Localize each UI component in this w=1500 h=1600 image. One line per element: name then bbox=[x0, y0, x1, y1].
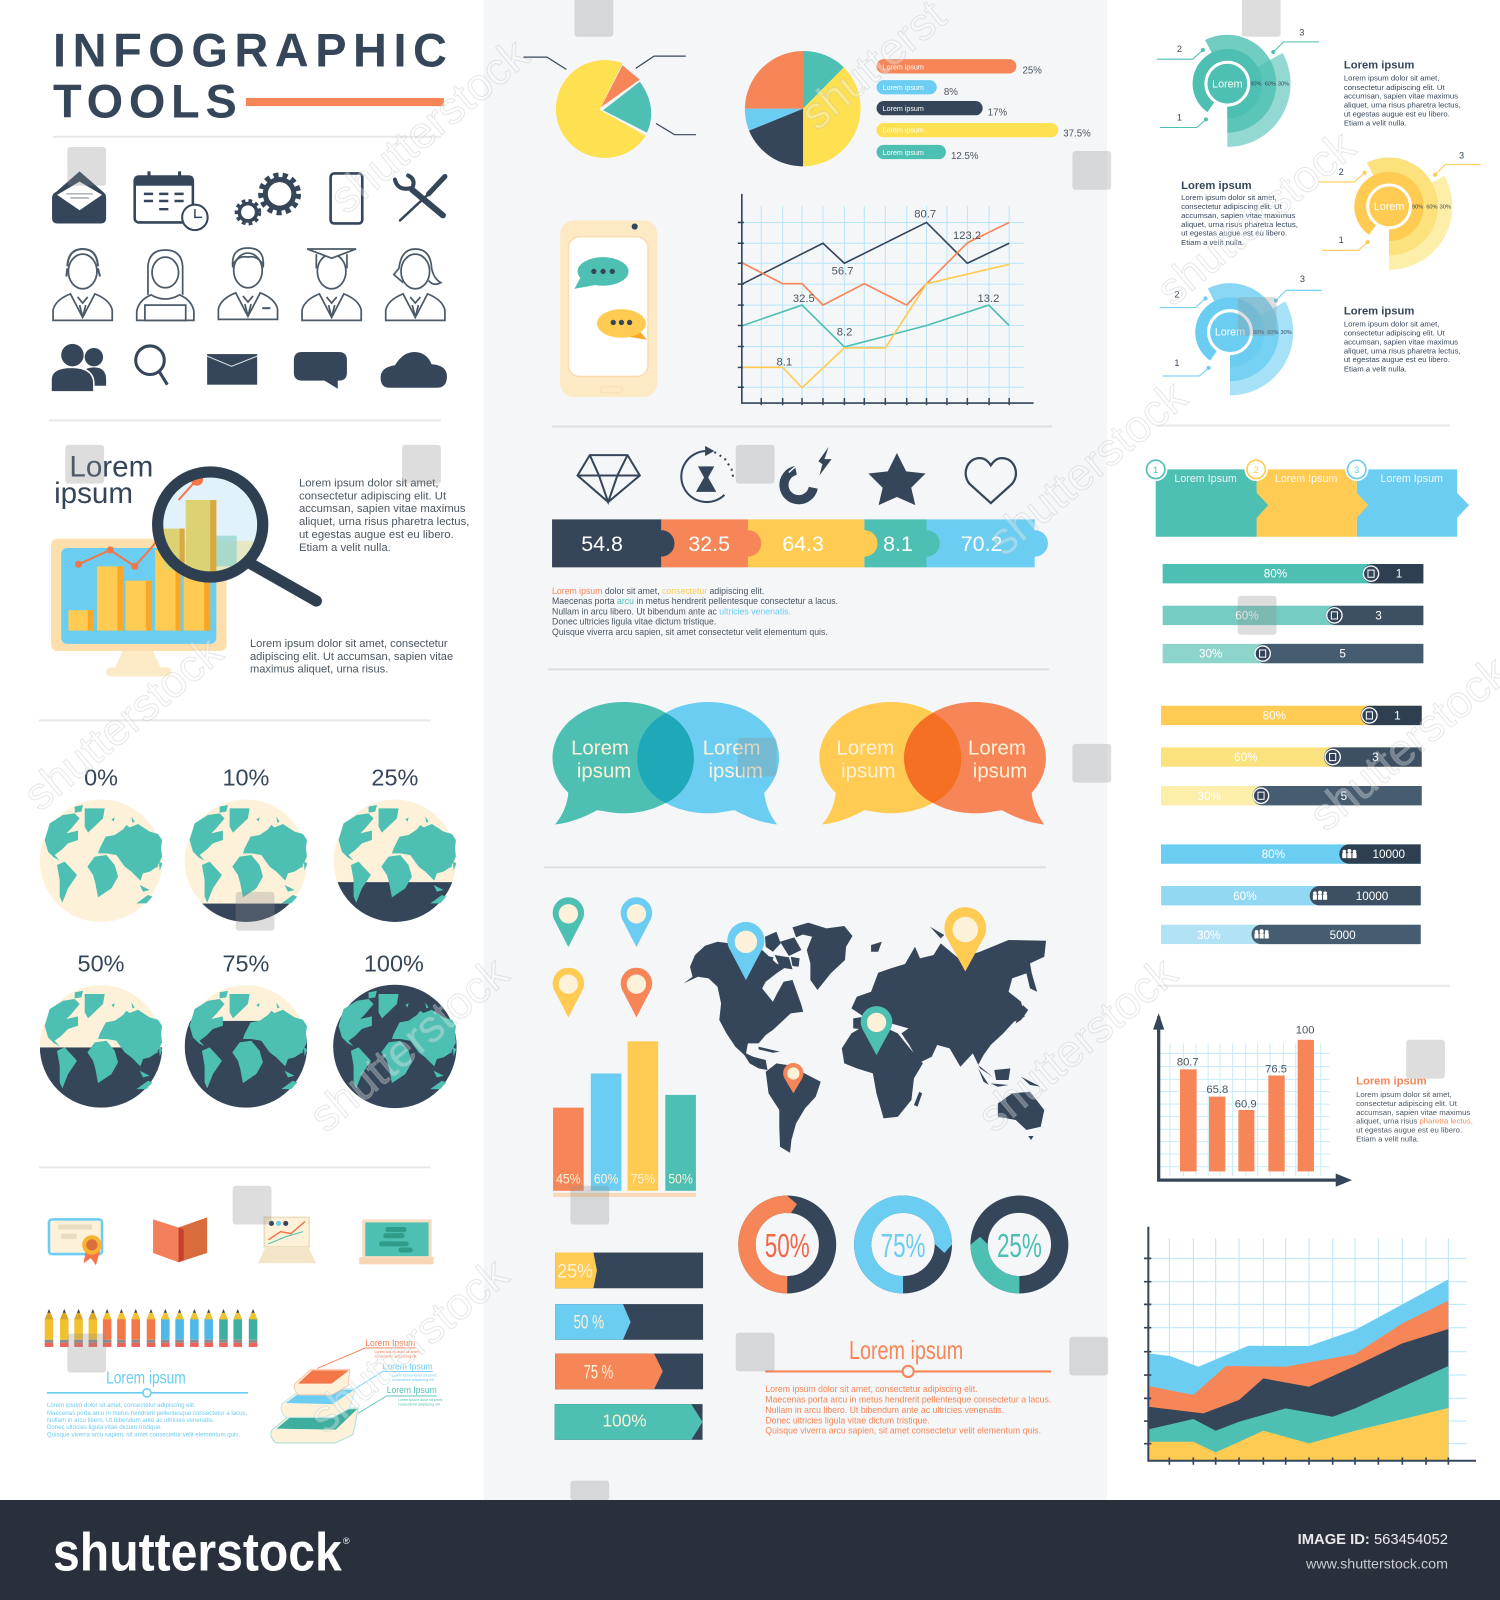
text block: teal radial note bbox=[1344, 59, 1461, 128]
chart: exploded pie bbox=[523, 56, 696, 158]
icon: stacked books with callouts: Lorem ipsum dolor sit amet, bbox=[374, 1350, 420, 1354]
speech bubbles: yellow and orange: ipsum bbox=[973, 761, 1027, 783]
radial chart: blue: 60% bbox=[1267, 330, 1278, 336]
chart: puzzle segment bar: 64.3 bbox=[782, 532, 824, 556]
chart: pie with labelled bars: Lorem ipsum bbox=[883, 127, 924, 135]
title: TOOLS bbox=[53, 75, 237, 127]
text block: monitor description: Lorem ipsum dolor sit amet, bbox=[299, 478, 439, 490]
chart: multi-line chart: 8.2 bbox=[837, 327, 852, 339]
text block: coloured paragraph: Lorem ipsum dolor sit amet, consectetur adipiscing elit. bbox=[552, 586, 764, 596]
text block: monitor description: consectetur adipiscing elit. Ut bbox=[299, 490, 447, 502]
text block: blue paragraph: Donec ultricies ligula vitae dictum tristique. bbox=[47, 1424, 162, 1431]
globes: progress set: 0% bbox=[84, 765, 118, 791]
donut: 75% bbox=[863, 1204, 953, 1285]
icon: hourglass with timer bbox=[681, 446, 734, 502]
speech bubbles: teal and blue: ipsum bbox=[709, 761, 763, 783]
chart: multi-line chart: 80.7 bbox=[914, 208, 936, 220]
text block: blue paragraph: Quisque viverra arcu sapien, sit amet consectetur velit elementum quis. bbox=[47, 1432, 240, 1439]
speech bubbles: teal and blue bbox=[553, 702, 779, 824]
watermark: diagonal text: shutterstock bbox=[320, 28, 538, 223]
icon: stacked books with callouts: consectetur adipiscing elit. bbox=[398, 1403, 441, 1407]
text block: teal radial note: aliquet, urna risus pharetra lectus, bbox=[1344, 101, 1461, 110]
icon: businessman bbox=[218, 248, 278, 319]
icon: phone with chat bubbles bbox=[560, 220, 657, 397]
pencils row bbox=[45, 1309, 257, 1347]
chart: pie with labelled bars: Lorem ipsum bbox=[883, 84, 924, 92]
footer image id: www.shutterstock.com bbox=[1305, 1556, 1448, 1572]
bar set: blue people bars: 60% bbox=[1233, 890, 1257, 903]
text block: orange paragraph: Lorem ipsum dolor sit amet, consectetur adipiscing elit. bbox=[765, 1384, 978, 1394]
text block: monitor note: adipiscing elit. Ut accumsan, sapien vitae bbox=[250, 651, 453, 663]
radial chart: yellow bbox=[1319, 150, 1481, 270]
text block: blue radial note: consectetur adipiscing elit. Ut bbox=[1344, 329, 1446, 338]
icon: open envelope bbox=[52, 171, 106, 223]
globe 75% bbox=[185, 985, 307, 1109]
chart: puzzle segment bar: 70.2 bbox=[961, 532, 1002, 556]
progress bar 75%: 75 % bbox=[584, 1362, 613, 1384]
globe 0% bbox=[40, 799, 162, 922]
text block: yellow radial note bbox=[1181, 180, 1298, 247]
footer logo: ® bbox=[343, 1536, 350, 1546]
icon: magnifying glass over chart bbox=[158, 472, 316, 601]
icon: stacked books with callouts: consectetur adipiscing elit. bbox=[392, 1378, 435, 1382]
globe 25% bbox=[334, 799, 456, 923]
donut: 75%: 75% bbox=[881, 1228, 926, 1265]
radial chart: blue: Lorem bbox=[1215, 327, 1245, 339]
icon: stacked books with callouts: Lorem ipsum dolor sit amet, bbox=[398, 1398, 443, 1402]
icon: stacked books with callouts: Lorem Ipsum bbox=[383, 1361, 433, 1371]
icon: businesswoman bbox=[386, 249, 445, 320]
text block: teal radial note: Etiam a velit nulla. bbox=[1344, 119, 1407, 128]
chart: puzzle segment bar: 54.8 bbox=[581, 532, 623, 556]
text block: orange paragraph: Donec ultricies ligula vitae dictum tristique. bbox=[765, 1415, 930, 1425]
text block: orange bar chart note: Lorem ipsum bbox=[1356, 1076, 1427, 1088]
bar set: teal duration bars bbox=[1163, 564, 1423, 663]
text block: yellow radial note: aliquet, urna risus pharetra lectus, bbox=[1181, 220, 1298, 229]
radial chart: teal: 90% bbox=[1250, 82, 1262, 88]
pin: Mediterranean bbox=[861, 1006, 892, 1055]
chart: multi-line chart: 8.1 bbox=[777, 356, 792, 368]
chart: pie with labelled bars: Lorem ipsum bbox=[883, 63, 924, 71]
chart: vertical bars bbox=[553, 1041, 696, 1197]
text block: monitor description: Etiam a velit nulla. bbox=[299, 542, 391, 554]
chart: orange bar chart: 65.8 bbox=[1206, 1084, 1228, 1096]
chart: orange bar chart: 100 bbox=[1296, 1024, 1314, 1036]
watermark: diagonal text: shutterstock bbox=[14, 625, 232, 820]
text block: yellow radial note: Lorem ipsum bbox=[1181, 180, 1252, 192]
text block: blue paragraph: Maecenas porta arcu in metus hendrerit pellentesque consectetur a lacus. bbox=[47, 1410, 248, 1417]
globe 50% bbox=[40, 985, 162, 1109]
icon: user group bbox=[51, 344, 106, 392]
radial chart: blue: 2 bbox=[1174, 289, 1179, 299]
icon: cloud bbox=[381, 352, 447, 388]
donut: 25%: 25% bbox=[997, 1228, 1042, 1265]
globes: progress set: 25% bbox=[371, 765, 419, 791]
text block: monitor note: Lorem ipsum dolor sit amet, consectetur bbox=[250, 638, 448, 650]
icon: map pin set bbox=[553, 897, 652, 1017]
watermark: diagonal text: shutterstock bbox=[1146, 120, 1365, 315]
radial chart: yellow: 60% bbox=[1426, 204, 1438, 210]
icon: laptop with chart bbox=[258, 1217, 316, 1263]
chart: pie with labelled bars: 17% bbox=[988, 107, 1008, 118]
globes: progress set: 10% bbox=[222, 765, 270, 791]
radial chart: blue: 3 bbox=[1300, 274, 1305, 284]
icon: calendar and clock bbox=[135, 171, 208, 230]
chart: multi-line chart: 123.2 bbox=[953, 230, 981, 242]
text block: orange bar chart note: aliquet, urna risus pharetra lectus, bbox=[1356, 1116, 1473, 1125]
radial chart: teal: 2 bbox=[1177, 44, 1182, 54]
text block: blue radial note: Lorem ipsum bbox=[1344, 305, 1414, 317]
heading: Lorem ipsum: ipsum bbox=[54, 477, 133, 510]
radial chart: yellow: Lorem bbox=[1374, 201, 1404, 213]
text block: orange bar chart note bbox=[1356, 1076, 1473, 1143]
text block: coloured paragraph: Nullam in arcu libero. Ut bibendum ante ac ultricies venenatis. bbox=[552, 606, 791, 616]
chart: orange bar chart: 60.9 bbox=[1235, 1099, 1257, 1111]
heading: orange Lorem ipsum with rule: Lorem ipsum bbox=[849, 1337, 963, 1365]
icon: magnet bbox=[784, 447, 832, 500]
radial chart: teal: 30% bbox=[1278, 82, 1289, 88]
text block: blue radial note: aliquet, urna risus pharetra lectus, bbox=[1344, 347, 1461, 356]
radial chart: blue: 30% bbox=[1281, 330, 1292, 336]
chart: pie with labelled bars: Lorem ipsum bbox=[883, 105, 924, 113]
speech bubbles: yellow and orange bbox=[819, 702, 1046, 824]
icon: magnifying glass bbox=[136, 346, 167, 385]
chart: orange bar chart bbox=[1153, 1013, 1352, 1187]
footer logo: shutterstock bbox=[53, 1522, 343, 1582]
icon: stacked books with callouts: Lorem ipsum dolor sit amet, bbox=[392, 1374, 437, 1378]
bar set: yellow duration bars: 1 bbox=[1394, 709, 1401, 722]
chart: orange bar chart: 76.5 bbox=[1265, 1063, 1287, 1075]
progress bar 25%: 25% bbox=[557, 1261, 593, 1283]
text block: blue radial note: Etiam a velit nulla. bbox=[1344, 364, 1407, 373]
speech bubbles: yellow and orange: ipsum bbox=[841, 761, 896, 783]
icon: gears bbox=[237, 175, 298, 223]
progress bar 100%: 100% bbox=[602, 1411, 647, 1431]
bar set: teal duration bars: 1 bbox=[1396, 568, 1402, 581]
title: INFOGRAPHIC bbox=[53, 24, 447, 76]
progress bar 100% bbox=[555, 1404, 703, 1440]
icon: stacked books with callouts: consectetur adipiscing elit. bbox=[374, 1355, 417, 1359]
text block: orange paragraph: Nullam in arcu libero. Ut bibendum ante ac ultricies venenatis. bbox=[765, 1405, 1004, 1415]
speech bubbles: teal and blue: Lorem bbox=[703, 738, 761, 760]
watermark: diagonal text: shutterstock bbox=[299, 1248, 518, 1443]
chart: puzzle segment bar bbox=[552, 519, 1048, 567]
text block: orange bar chart note: Etiam a velit nulla. bbox=[1356, 1134, 1419, 1143]
chart: orange bar chart: 80.7 bbox=[1177, 1057, 1199, 1069]
text block: yellow radial note: consectetur adipiscing elit. Ut bbox=[1181, 202, 1283, 211]
chart: puzzle segment bar: 8.1 bbox=[883, 532, 913, 556]
globes: progress set bbox=[40, 765, 457, 1109]
text block: yellow radial note: Etiam a velit nulla. bbox=[1181, 238, 1244, 247]
chart: pie with labelled bars: 37.5% bbox=[1063, 129, 1091, 140]
progress bar 50% bbox=[555, 1304, 703, 1340]
bar set: blue people bars bbox=[1161, 844, 1421, 944]
chart: pie with labelled bars bbox=[745, 51, 1091, 166]
text block: teal radial note: Lorem ipsum bbox=[1344, 59, 1414, 71]
process arrows: three steps: 3 bbox=[1354, 465, 1359, 475]
radial chart: teal bbox=[1157, 28, 1319, 147]
process arrows: three steps: 1 bbox=[1153, 465, 1158, 475]
chart: multi-line chart bbox=[738, 194, 1034, 405]
icon: stacked books with callouts: Lorem Ipsum bbox=[365, 1338, 416, 1348]
text block: blue radial note: Lorem ipsum dolor sit amet, bbox=[1344, 320, 1440, 329]
heading: blue Lorem ipsum with rule: Lorem ipsum bbox=[106, 1368, 186, 1388]
pin: North America bbox=[727, 922, 764, 980]
radial chart: blue: 1 bbox=[1174, 358, 1179, 368]
icon: speech bubble bbox=[294, 352, 347, 389]
text block: orange paragraph: Maecenas porta arcu in metus hendrerit pellentesque consectetur a lacus. bbox=[765, 1395, 1051, 1405]
icon: tablet bbox=[331, 173, 362, 223]
chart: vertical bars: 50% bbox=[668, 1172, 693, 1188]
radial chart: yellow: 2 bbox=[1339, 167, 1344, 177]
text block: monitor note: maximus aliquet, urna risus. bbox=[250, 663, 388, 675]
speech bubbles: teal and blue: Lorem bbox=[571, 738, 629, 760]
text block: teal radial note: ut egestas augue est eu libero. bbox=[1344, 109, 1450, 118]
heading: orange Lorem ipsum with rule bbox=[765, 1337, 1051, 1377]
chart: pie with labelled bars: 8% bbox=[944, 87, 958, 98]
text block: monitor description: ut egestas augue est eu libero. bbox=[299, 529, 454, 541]
text block: orange bar chart note: consectetur adipiscing elit. Ut bbox=[1356, 1099, 1458, 1108]
radial chart: teal: 3 bbox=[1299, 28, 1304, 38]
text block: orange bar chart note: accumsan, sapien vitae maximus bbox=[1356, 1108, 1470, 1117]
bar set: blue people bars: 5000 bbox=[1330, 929, 1356, 942]
icon: stacked books with callouts: Lorem Ipsum bbox=[387, 1385, 437, 1395]
globes: progress set: 100% bbox=[364, 950, 424, 976]
text block: teal radial note: Lorem ipsum dolor sit amet, bbox=[1344, 74, 1440, 83]
text block: yellow radial note: accumsan, sapien vitae maximus bbox=[1181, 211, 1295, 220]
globe 10% bbox=[185, 799, 307, 924]
bar set: blue people bars: 30% bbox=[1197, 929, 1220, 942]
title accent bar bbox=[246, 98, 444, 106]
map: world map with pins bbox=[684, 907, 1046, 1153]
footer image id bbox=[1298, 1532, 1448, 1572]
footer band bbox=[0, 1500, 1500, 1600]
text block: coloured paragraph: Maecenas porta arcu in metus hendrerit pellentesque consectetur a lacus. bbox=[552, 596, 838, 606]
icon: certificate bbox=[49, 1219, 102, 1265]
icon: heart bbox=[966, 458, 1016, 503]
radial chart: blue: 90% bbox=[1253, 330, 1264, 336]
process arrows: three steps: Lorem Ipsum bbox=[1381, 473, 1443, 485]
text block: blue radial note: ut egestas augue est eu libero. bbox=[1344, 355, 1450, 364]
text block: orange bar chart note: Lorem ipsum dolor sit amet, bbox=[1356, 1090, 1452, 1099]
speech bubbles: teal and blue: ipsum bbox=[577, 761, 631, 783]
bar set: blue people bars: 10000 bbox=[1356, 890, 1389, 903]
progress bar 25% bbox=[555, 1253, 703, 1288]
text block: blue radial note bbox=[1344, 305, 1461, 373]
panel: centre column background bbox=[484, 0, 1107, 1500]
text block: blue radial note: accumsan, sapien vitae maximus bbox=[1344, 337, 1458, 346]
pin: South America bbox=[783, 1063, 804, 1093]
process arrows: three steps bbox=[1144, 458, 1469, 537]
icon: stacked books with callouts bbox=[271, 1338, 443, 1443]
watermark: diagonal text: shutterstock bbox=[978, 370, 1196, 565]
donut: 50% bbox=[747, 1195, 828, 1285]
icon: envelope bbox=[207, 354, 257, 385]
text block: teal radial note: accumsan, sapien vitae maximus bbox=[1344, 91, 1458, 100]
chart: vertical bars: 60% bbox=[594, 1172, 619, 1188]
watermark: diagonal text: shutterstock bbox=[968, 947, 1186, 1142]
icon: woman at laptop bbox=[137, 250, 194, 320]
icon: monitor with bar chart bbox=[51, 480, 227, 677]
bar set: yellow duration bars: 5 bbox=[1341, 790, 1348, 803]
chart: vertical bars: 45% bbox=[556, 1172, 581, 1188]
process arrows: three steps: 2 bbox=[1254, 465, 1259, 475]
chart: pie with labelled bars: 12.5% bbox=[951, 151, 979, 162]
globe 100% bbox=[333, 985, 457, 1108]
bar set: teal duration bars: 3 bbox=[1375, 609, 1382, 622]
radial chart: yellow: 1 bbox=[1339, 235, 1344, 245]
icon: open book bbox=[153, 1217, 207, 1262]
chart: pie with labelled bars: 25% bbox=[1022, 65, 1042, 76]
bar set: teal duration bars: 80% bbox=[1264, 568, 1287, 581]
icon: graduate bbox=[302, 249, 361, 320]
bar set: yellow duration bars bbox=[1161, 706, 1422, 805]
text block: yellow radial note: Lorem ipsum dolor sit amet, bbox=[1181, 193, 1277, 202]
progress bar 50%: 50 % bbox=[573, 1312, 604, 1334]
text block: monitor description: accumsan, sapien vitae maximus bbox=[299, 503, 466, 515]
chart: puzzle segment bar: 32.5 bbox=[688, 532, 730, 556]
text block: coloured paragraph: Quisque viverra arcu sapien, sit amet consectetur velit elementum quis. bbox=[552, 627, 828, 637]
radial chart: yellow: 3 bbox=[1459, 150, 1464, 160]
bar set: teal duration bars: 60% bbox=[1235, 609, 1259, 622]
process arrows: three steps: Lorem Ipsum bbox=[1174, 473, 1237, 485]
title bbox=[53, 24, 447, 127]
bar set: yellow duration bars: 60% bbox=[1234, 751, 1258, 764]
icon: star bbox=[868, 453, 926, 505]
watermark: diagonal text: shutterstock bbox=[299, 947, 518, 1142]
speech bubbles: yellow and orange: Lorem bbox=[836, 738, 894, 760]
text block: orange bar chart note: ut egestas augue est eu libero. bbox=[1356, 1125, 1462, 1134]
radial chart: yellow: 90% bbox=[1412, 204, 1423, 210]
radial chart: yellow: 30% bbox=[1440, 204, 1451, 210]
chart: pie with labelled bars: Lorem ipsum bbox=[883, 149, 924, 157]
radial chart: blue bbox=[1160, 274, 1322, 395]
pin: Russia bbox=[944, 907, 986, 971]
icon: diamond bbox=[578, 455, 640, 502]
chart: multi-line chart: 56.7 bbox=[832, 265, 853, 277]
radial chart: teal: Lorem bbox=[1212, 78, 1243, 90]
bar set: yellow duration bars: 30% bbox=[1197, 790, 1221, 803]
icon: wrench and screwdriver bbox=[395, 176, 445, 220]
text block: teal radial note: consectetur adipiscing elit. Ut bbox=[1344, 83, 1446, 92]
donut: 25% bbox=[970, 1204, 1060, 1285]
bar set: teal duration bars: 30% bbox=[1199, 648, 1222, 661]
globes: progress set: 75% bbox=[222, 950, 270, 976]
chart: stacked area chart bbox=[1144, 1227, 1476, 1465]
donut: 50%: 50% bbox=[765, 1228, 810, 1265]
radial chart: teal: 60% bbox=[1265, 82, 1276, 88]
heading: Lorem ipsum: Lorem bbox=[69, 451, 153, 484]
text block: blue paragraph: Nullam in arcu libero. Ut bibendum ante ac ultricies venenatis. bbox=[47, 1417, 215, 1424]
chart: multi-line chart: 13.2 bbox=[978, 293, 999, 305]
globes: progress set: 50% bbox=[78, 950, 125, 976]
bar set: yellow duration bars: 3 bbox=[1372, 751, 1379, 764]
text block: blue paragraph: Lorem ipsum dolor sit amet, consectetur adipiscing elit. bbox=[47, 1402, 196, 1409]
bar set: blue people bars: 10000 bbox=[1372, 848, 1406, 861]
process arrows: three steps: Lorem Ipsum bbox=[1275, 473, 1337, 485]
bar set: blue people bars: 80% bbox=[1262, 848, 1285, 861]
bar set: teal duration bars: 5 bbox=[1339, 648, 1346, 661]
text block: coloured paragraph: Donec ultricies ligula vitae dictum tristique. bbox=[552, 616, 716, 626]
text block: orange paragraph: Quisque viverra arcu sapien, sit amet consectetur velit elementum quis. bbox=[765, 1426, 1041, 1436]
chart: vertical bars: 75% bbox=[631, 1172, 655, 1188]
text block: monitor description: aliquet, urna risus pharetra lectus, bbox=[299, 516, 469, 528]
progress bar 75% bbox=[555, 1354, 703, 1389]
speech bubbles: yellow and orange: Lorem bbox=[968, 738, 1026, 760]
radial chart: teal: 1 bbox=[1177, 112, 1182, 122]
text block: yellow radial note: ut egestas augue est eu libero. bbox=[1181, 229, 1287, 238]
icon: chalkboard bbox=[359, 1219, 434, 1264]
bar set: yellow duration bars: 80% bbox=[1263, 709, 1286, 722]
heading: blue Lorem ipsum with rule bbox=[47, 1368, 248, 1397]
footer image id: IMAGE ID: 563454052 bbox=[1298, 1532, 1448, 1548]
chart: multi-line chart: 32.5 bbox=[793, 293, 815, 305]
icon: support agent bbox=[53, 249, 112, 320]
